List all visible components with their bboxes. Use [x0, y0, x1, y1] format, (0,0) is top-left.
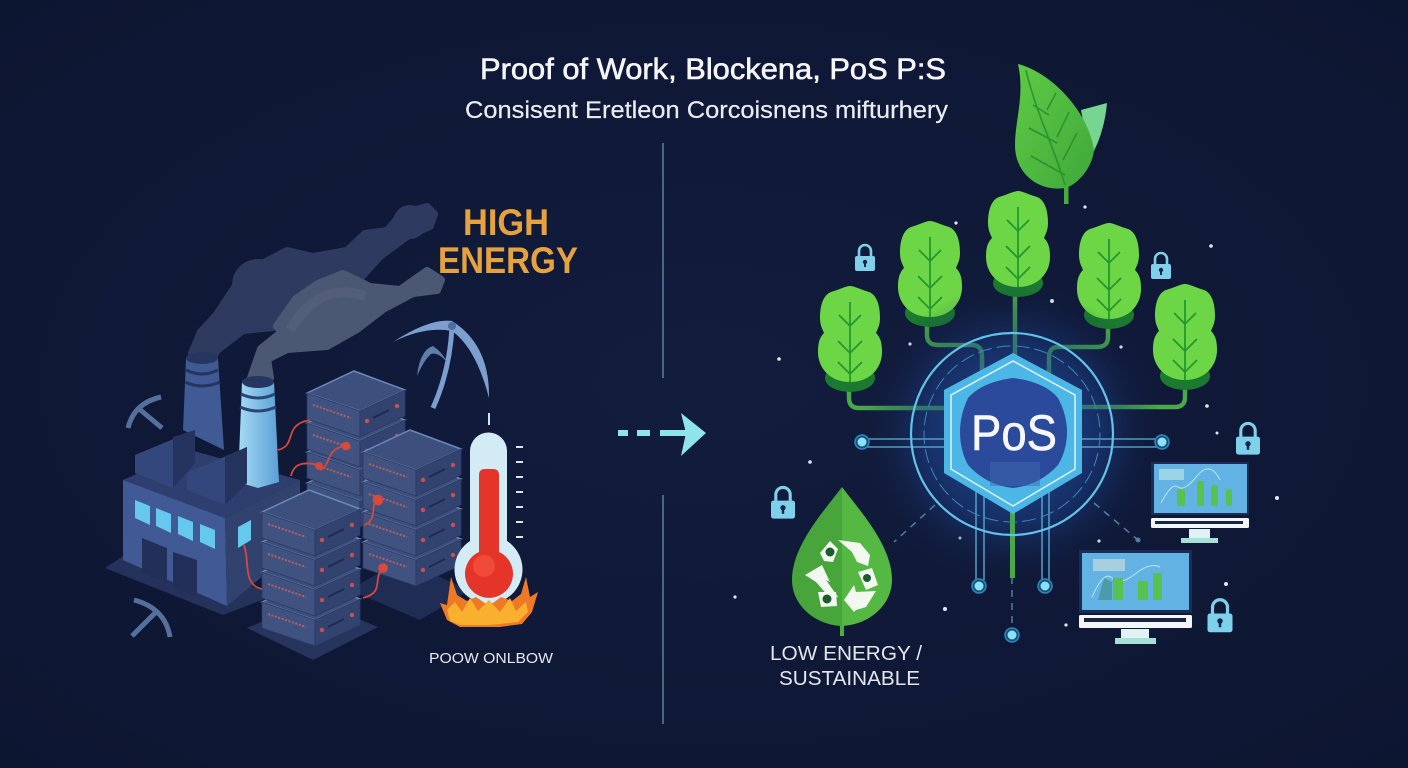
chimney 1: [183, 352, 224, 450]
panel: Proof of Work: [105, 202, 578, 667]
title: Proof of Work, Blockena, PoS P:S: [480, 53, 946, 86]
label: low energy sustainable: SUSTAINABLE: [779, 668, 920, 690]
smoke clouds: [192, 205, 441, 378]
arrow: transition from PoW to PoS: [618, 413, 706, 456]
PoS label: PoS: [971, 405, 1057, 461]
hexagon badge: [944, 353, 1082, 514]
icon: large leaf: [1015, 64, 1107, 204]
center divider: [662, 143, 664, 724]
PoS core: [855, 284, 1169, 642]
factory: [105, 352, 300, 615]
server stacks: [247, 371, 470, 660]
padlock icons: [771, 245, 1260, 632]
monitor: upper dashboard: [1151, 462, 1249, 543]
icon: flames: [440, 577, 538, 627]
label: high energy: ENERGY: [438, 240, 578, 281]
label: high energy: [438, 202, 578, 281]
icon: small pickaxe lower left: [132, 600, 170, 637]
factory windows: [135, 500, 251, 549]
connector lines and nodes: [855, 435, 1169, 642]
panel: Proof of Stake: [733, 64, 1279, 690]
background sparkle dots: [733, 205, 1279, 627]
factory doors: [142, 538, 197, 597]
red power cables: [244, 420, 387, 598]
label: high energy: HIGH: [463, 202, 549, 243]
monitor: lower dashboard: [1079, 550, 1192, 644]
label: pow caption: POOW ONLBOW: [429, 650, 554, 667]
recycle symbols: [805, 540, 878, 612]
subtitle: Consisent Eretleon Corcoisnens mifturhery: [465, 97, 948, 124]
label: low energy sustainable: [770, 643, 922, 690]
label: low energy sustainable: LOW ENERGY /: [770, 643, 922, 665]
icon: big pickaxe: [393, 321, 489, 408]
green stems: [849, 296, 1185, 408]
icon: thermometer: [454, 413, 523, 604]
icon: recycling leaf: [792, 487, 892, 636]
chimney 2: [238, 376, 279, 488]
leaf nodes: [818, 191, 1217, 392]
icon: small pickaxe upper left: [128, 397, 162, 428]
